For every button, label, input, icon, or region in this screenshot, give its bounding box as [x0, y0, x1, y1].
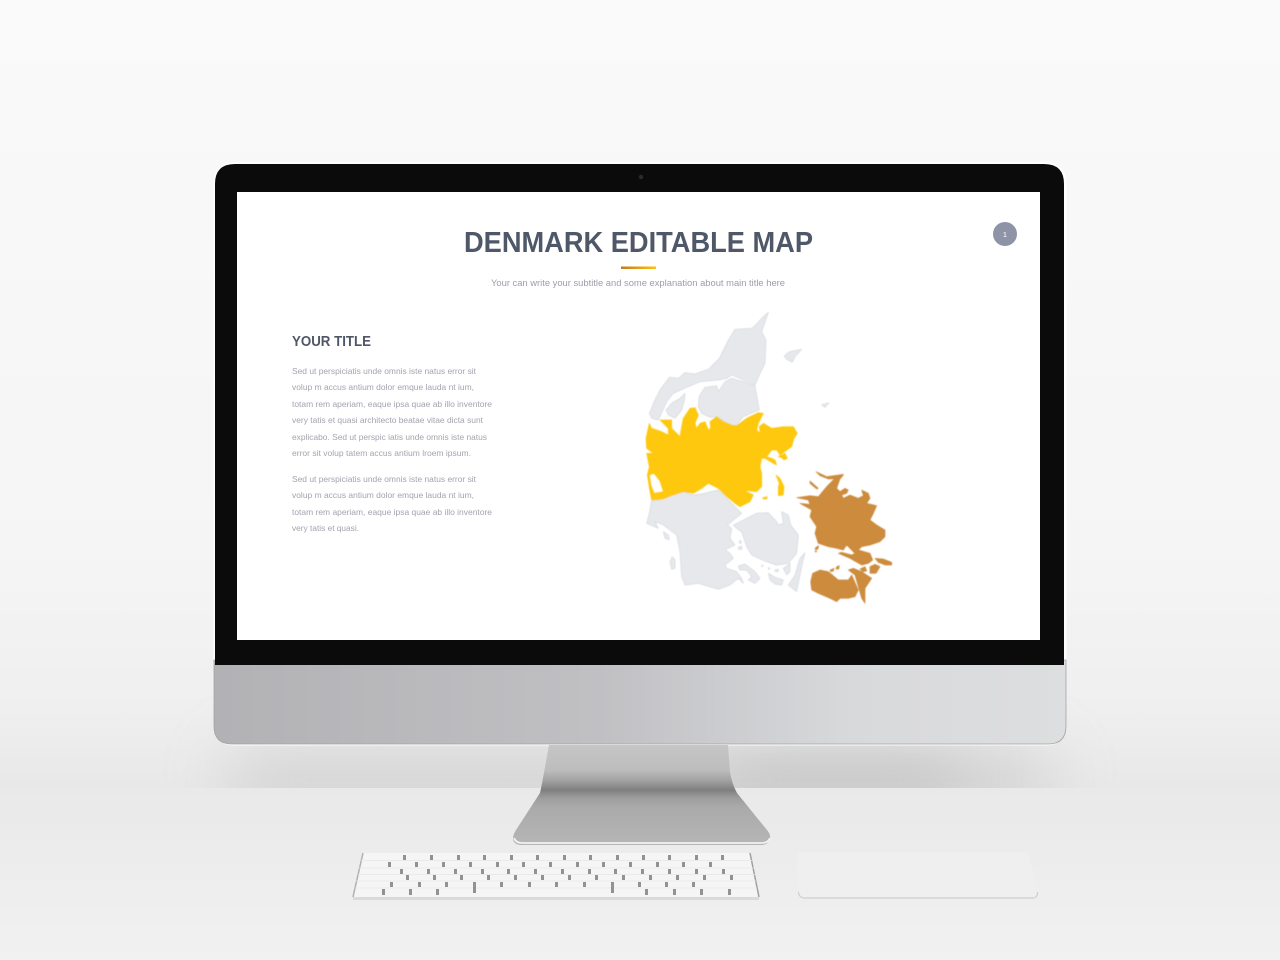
keyboard	[353, 853, 759, 900]
page number badge	[993, 222, 1017, 246]
paragraph one: explicabo. Sed ut perspic iatis unde omnis iste natus	[292, 432, 487, 442]
heading: YOUR TITLE	[292, 334, 371, 350]
key gaps	[382, 855, 733, 895]
paragraph one: volup m accus antium dolor emque lauda nt ium,	[292, 382, 474, 392]
subtitle: Your can write your subtitle and some explanation about main title here	[491, 278, 785, 289]
monitor stand	[513, 745, 770, 845]
paragraph two: volup m accus antium dolor emque lauda nt ium,	[292, 490, 474, 500]
title underline	[621, 266, 656, 269]
map of Denmark	[646, 312, 892, 603]
paragraph one: totam rem aperiam, eaque ipsa quae ab illo inventore	[292, 399, 492, 409]
title: DENMARK EDITABLE MAP	[464, 227, 813, 259]
region: Zealand and islands (orange)	[797, 472, 892, 603]
paragraph two: totam rem aperiam, eaque ipsa quae ab illo inventore	[292, 507, 492, 517]
page number badge: 1	[1003, 230, 1007, 239]
paragraph two	[292, 474, 492, 533]
trackpad	[797, 852, 1038, 898]
keyboard rows	[355, 860, 757, 888]
paragraph two: Sed ut perspiciatis unde omnis iste natus error sit	[292, 474, 477, 484]
region: north Jutland (grey)	[649, 312, 829, 427]
paragraph one: error sit volup tatem accus antium lroem ipsum.	[292, 448, 471, 458]
monitor	[214, 162, 1066, 845]
monitor chin	[214, 660, 1066, 744]
webcam	[639, 175, 643, 179]
paragraph one	[292, 366, 492, 458]
region: south Jutland and Funen (grey)	[647, 490, 805, 592]
keyboard body	[353, 853, 759, 900]
paragraph one: very tatis et quasi architecto beatae vitae dicta sunt	[292, 415, 484, 425]
paragraph one: Sed ut perspiciatis unde omnis iste natus error sit	[292, 366, 477, 376]
text block: your title	[292, 334, 492, 533]
region: mid Jutland (yellow)	[646, 408, 797, 507]
monitor bezel	[215, 164, 1064, 665]
paragraph two: very tatis et quasi.	[292, 523, 359, 533]
screen	[237, 192, 1040, 640]
